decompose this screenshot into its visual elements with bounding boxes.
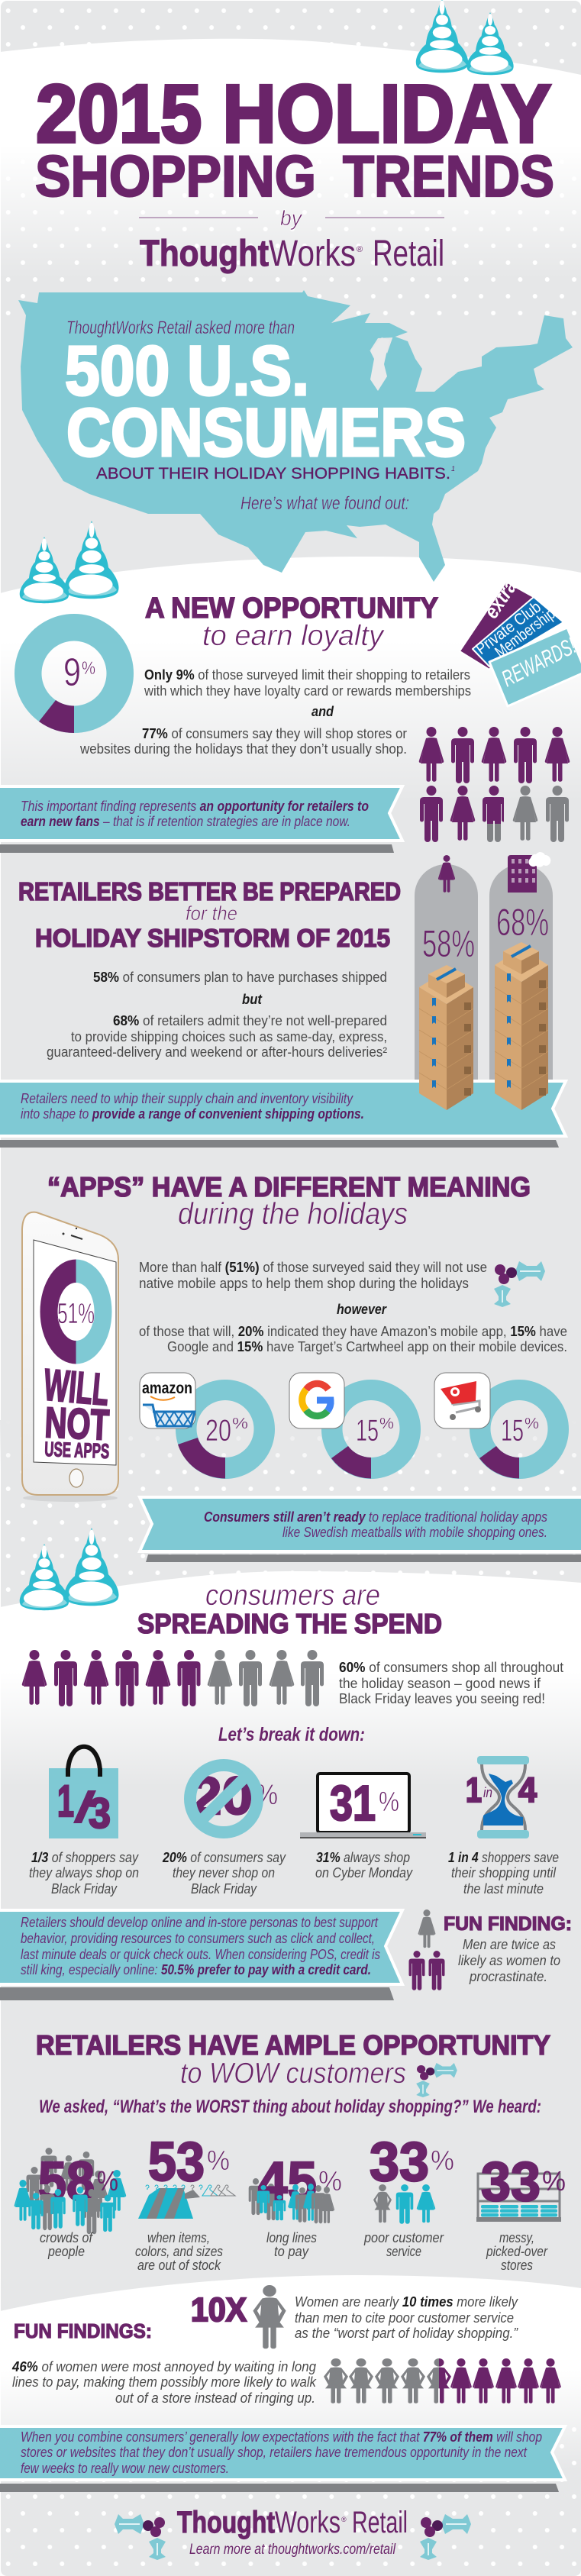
- donut chart: amazon 20%: [140, 1373, 275, 1479]
- stat: 1 in 4 last minute: [448, 1756, 559, 1896]
- icon: loyalty cards: Membership: [492, 605, 558, 661]
- icon: holly: [494, 1261, 545, 1307]
- section: wow customers: [0, 2029, 566, 2492]
- break it down label: Let’s break it down:: [218, 1724, 365, 1745]
- title: TRENDS: [343, 144, 554, 209]
- stat: messy stores 33%: messy,: [499, 2230, 534, 2245]
- icon: loyalty cards: extra: [479, 576, 521, 622]
- section: retailers better be prepared: [0, 852, 566, 1148]
- stat: 1/3 black friday: 1: [57, 1777, 74, 1826]
- banner: shipping: into shape to provide a range of convenient shipping options.: [21, 1106, 364, 1122]
- stat: crowds 58%: %: [97, 2165, 118, 2197]
- stat: messy stores 33%: 33: [481, 2152, 541, 2213]
- stat: messy stores 33%: picked-over: [486, 2244, 548, 2259]
- section: spreading the spend: [0, 1580, 572, 2000]
- stat: 1/3 black friday: they always shop on: [29, 1865, 139, 1880]
- body text: and: [311, 704, 334, 719]
- heading: SPREADING THE SPEND: [137, 1608, 442, 1639]
- body text: but: [242, 992, 263, 1007]
- section: a new opportunity: [0, 576, 581, 853]
- stat: messy stores 33%: stores: [501, 2258, 533, 2273]
- body text: 60% of consumers shop all throughout: [339, 1660, 563, 1675]
- stat: 31% cyber monday: 31: [330, 1775, 376, 1831]
- stat: poor service 33%: %: [431, 2145, 454, 2176]
- body text: [339, 1660, 563, 1706]
- stat: crowds 58%: [15, 2148, 126, 2259]
- stat: 31% cyber monday: %: [379, 1786, 399, 1817]
- fun finding: procrastination: procrastinate.: [469, 1969, 547, 1984]
- footer: [115, 2506, 471, 2560]
- chart: 68% box tower: [489, 852, 553, 1110]
- donut chart: google 15%: [289, 1373, 421, 1479]
- logo: ThoughtWorks Retail: Works: [275, 2506, 341, 2539]
- body text: websites during the holidays that they don’t usually shop.: [79, 741, 407, 757]
- stat: out of stock 53%: are out of stock: [137, 2258, 221, 2273]
- survey intro text: CONSUMERS: [66, 394, 466, 470]
- icon: phone showing 51%: [22, 1212, 118, 1502]
- pictogram: 77% of people: [419, 727, 570, 842]
- chart: 58% box tower: [415, 855, 478, 1110]
- icon: google app: [289, 1373, 344, 1428]
- finding: 46%: [11, 2358, 561, 2406]
- stat: long lines 45%: %: [318, 2165, 342, 2197]
- heading: A NEW OPPORTUNITY: [145, 592, 438, 625]
- stat: 20% never black friday: [162, 1765, 286, 1896]
- survey intro text: ThoughtWorks Retail asked more than: [66, 318, 295, 338]
- logo: ThoughtWorks Retail: Thought: [140, 234, 269, 274]
- donut chart 9%: %: [82, 658, 95, 679]
- banner: opportunity: earn new fans – that is if retention strategies are in place now.: [21, 814, 350, 829]
- donut chart: target 15%: [434, 1373, 569, 1479]
- heading: [137, 1580, 442, 1639]
- banner: opportunity: [0, 786, 402, 853]
- finding: 10X: [191, 2285, 518, 2348]
- stat: 20% never black friday: they never shop on: [173, 1865, 275, 1880]
- stat: 20% never black friday: 20: [191, 1766, 253, 1825]
- heading: [36, 2029, 550, 2090]
- heading: to WOW customers: [180, 2058, 406, 2090]
- stat: 20% never black friday: Black Friday: [191, 1881, 257, 1896]
- stat: 1 in 4 last minute: 1: [466, 1771, 482, 1809]
- fun finding: procrastination: Men are twice as: [463, 1937, 556, 1952]
- stat: 31% cyber monday: [300, 1774, 426, 1880]
- body text: [47, 970, 387, 1060]
- banner: conclusion: [0, 2426, 565, 2492]
- body text: Google and 15% have Target’s Cartwheel app on their mobile devices.: [167, 1339, 567, 1354]
- stat: 31% cyber monday: on Cyber Monday: [315, 1865, 413, 1880]
- phone caption: NOT: [44, 1398, 110, 1449]
- phone caption: WILL: [42, 1360, 111, 1415]
- logo: ThoughtWorks Retail: Retail: [373, 234, 444, 274]
- stat: 1 in 4 last minute: 1 in 4 shoppers save: [448, 1850, 559, 1865]
- byline: by: [280, 206, 303, 230]
- body text: Only 9% of those surveyed limit their shopping to retailers: [144, 667, 470, 683]
- banner: conclusion: few weeks to really wow new customers.: [21, 2461, 229, 2476]
- pictogram: 60% of people: [22, 1650, 324, 1706]
- section: apps: [22, 1171, 581, 1562]
- stat: long lines 45%: to pay: [274, 2244, 309, 2259]
- donut chart 51%: 51%: [57, 1298, 95, 1330]
- logo: ThoughtWorks Retail: Retail: [352, 2506, 408, 2539]
- stat: messy stores 33%: [476, 2152, 566, 2273]
- survey intro text: 500 U.S.: [65, 332, 309, 410]
- title: SHOPPING: [35, 144, 316, 209]
- survey intro text: Here’s what we found out:: [240, 493, 409, 514]
- fun finding: procrastination: [409, 1909, 572, 1990]
- donut chart 51%: [40, 1260, 112, 1364]
- donut chart: amazon 20%: %: [232, 1416, 248, 1432]
- stat: 1/3 black friday: Black Friday: [51, 1881, 118, 1896]
- heading: consumers are: [205, 1580, 380, 1612]
- stat: 1 in 4 last minute: 4: [518, 1771, 537, 1809]
- icon: snowy trees left: [20, 521, 118, 603]
- finding: 46%: 46% of women were most annoyed by waiting in long: [11, 2359, 316, 2374]
- heading: [18, 877, 401, 952]
- stat: crowds 58%: crowds of: [40, 2230, 94, 2245]
- heading: “APPS” HAVE A DIFFERENT MEANING: [47, 1171, 531, 1202]
- stat: 1 in 4 last minute: their shopping until: [451, 1865, 557, 1880]
- finding: 10X: Women are nearly 10 times more likely: [295, 2294, 518, 2310]
- donut chart: google 15%: 15: [356, 1414, 379, 1448]
- body text: however: [337, 1302, 387, 1317]
- icon: amazon app: amazon: [142, 1380, 192, 1397]
- icon: target cartwheel app: [434, 1373, 490, 1428]
- logo: ThoughtWorks Retail: [140, 234, 444, 274]
- body text: Black Friday leaves you seeing red!: [339, 1691, 545, 1706]
- body text: [79, 667, 471, 757]
- finding: 46%: lines to pay, making them possibly more likely to walk: [12, 2374, 317, 2390]
- body text: guaranteed-delivery and weekend or after-hours deliveries²: [47, 1044, 387, 1060]
- banner: personas: [0, 1910, 402, 2000]
- fun finding: procrastination: likely as women to: [458, 1953, 560, 1968]
- banner: personas: last minute deals or quick check outs. When considering POS, credit is: [21, 1947, 380, 1962]
- map: Lake Michigan: [370, 337, 389, 391]
- logo: ThoughtWorks Retail: [177, 2506, 408, 2539]
- stat: out of stock 53%: colors, and sizes: [135, 2244, 223, 2259]
- icon: holly left: [115, 2514, 166, 2560]
- heading: for the: [186, 902, 237, 925]
- banner: opportunity: This important finding represents an opportunity for retailers to: [21, 799, 369, 814]
- stat: crowds 58%: people: [47, 2244, 85, 2259]
- stat: 20% never black friday: 20% of consumers say: [162, 1850, 286, 1865]
- body text: 58% of consumers plan to have purchases shipped: [93, 970, 387, 985]
- fun finding: procrastination: FUN FINDING:: [444, 1913, 572, 1935]
- donut chart 9%: [15, 614, 134, 733]
- stat: 1/3 black friday: [29, 1747, 139, 1896]
- stat: 1 in 4 last minute: the last minute: [463, 1881, 544, 1896]
- icon: amazon app: [140, 1373, 195, 1428]
- banner: swedish meatballs: Consumers still aren’t ready to replace traditional holiday apps: [204, 1509, 547, 1525]
- body text: More than half (51%) of those surveyed said they will not use: [139, 1260, 487, 1275]
- heading: HOLIDAY SHIPSTORM OF 2015: [35, 924, 390, 952]
- stat: poor service 33%: service: [386, 2244, 421, 2259]
- chart: 58% box tower: 58%: [422, 922, 475, 965]
- stat: 1/3 black friday: 1/3 of shoppers say: [31, 1850, 139, 1865]
- body text: to provide shipping choices such as same-day, express,: [71, 1029, 387, 1044]
- stat: out of stock 53%: [135, 2132, 235, 2273]
- banner: swedish meatballs: [140, 1497, 581, 1562]
- body text: 77% of consumers say they will shop stores or: [142, 726, 407, 741]
- phone caption: [42, 1360, 111, 1463]
- stat: poor service 33%: poor customer: [363, 2230, 444, 2245]
- stat: out of stock 53%: %: [207, 2145, 230, 2176]
- stat: poor service 33%: 33: [370, 2132, 429, 2193]
- banner: shipping: [0, 1081, 566, 1148]
- icon: snowy trees mid: [20, 1528, 118, 1610]
- survey intro text: 1: [451, 465, 455, 473]
- stat: 1 in 4 last minute: in: [483, 1785, 492, 1800]
- banner: conclusion: When you combine consumers’ generally low expectations with the fact that 77% of them will shop: [21, 2429, 542, 2445]
- subheading: to earn loyalty: [202, 620, 385, 652]
- logo: ThoughtWorks Retail: Thought: [177, 2506, 275, 2539]
- donut chart: target 15%: %: [525, 1416, 539, 1432]
- survey intro text: [65, 318, 466, 514]
- stat: long lines 45%: long lines: [266, 2230, 317, 2245]
- banner: personas: still king, especially online: 50.5% prefer to pay with a credit card.: [21, 1962, 371, 1977]
- body text: with which they have loyalty card or rewards memberships: [144, 683, 471, 699]
- icon: snowy trees top: [416, 0, 514, 75]
- icon: holly right: [420, 2514, 471, 2560]
- stat: long lines 45%: 45: [258, 2152, 317, 2213]
- body text: native mobile apps to help them shop during the holidays: [139, 1276, 469, 1291]
- fun findings heading: FUN FINDINGS:: [14, 2319, 152, 2342]
- pictogram: women: [324, 2358, 561, 2403]
- banner: personas: Retailers should develop online and in-store personas to best support: [21, 1915, 379, 1930]
- phone caption: USE APPS: [44, 1438, 110, 1463]
- body text: 68% of retailers admit they’re not well-prepared: [113, 1013, 387, 1028]
- logo: ThoughtWorks Retail: ®: [341, 2516, 347, 2523]
- learn more: Learn more at thoughtworks.com/retail: [189, 2542, 396, 2558]
- stat: poor service 33%: [363, 2132, 454, 2259]
- stat: messy stores 33%: %: [542, 2165, 566, 2197]
- finding: 46%: out of a store instead of ringing up.: [115, 2390, 315, 2406]
- stat: 20% never black friday: %: [256, 1779, 278, 1811]
- donut chart: amazon 20%: 20: [205, 1414, 231, 1448]
- finding: 10X: as the “worst part of holiday shopping.”: [295, 2326, 518, 2341]
- logo: ThoughtWorks Retail: Works: [269, 234, 356, 274]
- body text: of those that will, 20% indicated they have Amazon’s mobile app, 15% have: [139, 1324, 567, 1339]
- stat: crowds 58%: 58: [38, 2152, 95, 2213]
- finding: 10X: 10X: [191, 2291, 247, 2329]
- finding: 10X: than men to cite poor customer service: [295, 2310, 514, 2326]
- map: United States: [18, 290, 573, 582]
- icon: loyalty cards: Private Club: [473, 598, 544, 658]
- banner: shipping: Retailers need to whip their supply chain and inventory visibility: [21, 1091, 353, 1106]
- heading: RETAILERS BETTER BE PREPARED: [18, 877, 401, 905]
- logo: ThoughtWorks Retail: ®: [357, 245, 363, 254]
- banner: personas: behavior, providing resources to consumers such as click and collect,: [21, 1931, 375, 1946]
- title: [35, 67, 554, 209]
- stat: long lines 45%: [249, 2152, 342, 2259]
- icon: loyalty cards: [460, 576, 581, 706]
- survey intro text: ABOUT THEIR HOLIDAY SHOPPING HABITS.: [96, 465, 450, 483]
- subheading: during the holidays: [178, 1197, 408, 1231]
- stat: 1/3 black friday: 3: [89, 1789, 111, 1837]
- stat: out of stock 53%: when items,: [147, 2230, 210, 2245]
- icon: holly: [416, 2063, 457, 2097]
- donut chart: target 15%: 15: [501, 1414, 524, 1448]
- body text: [139, 1260, 567, 1354]
- stat: 31% cyber monday: 31% always shop: [316, 1850, 410, 1865]
- chart: 68% box tower: 68%: [496, 901, 549, 944]
- stat: out of stock 53%: 53: [148, 2132, 205, 2193]
- donut chart 9%: 9: [63, 650, 81, 695]
- body text: the holiday season – good news if: [339, 1676, 541, 1691]
- heading: RETAILERS HAVE AMPLE OPPORTUNITY: [36, 2029, 550, 2061]
- donut chart: google 15%: %: [379, 1416, 394, 1432]
